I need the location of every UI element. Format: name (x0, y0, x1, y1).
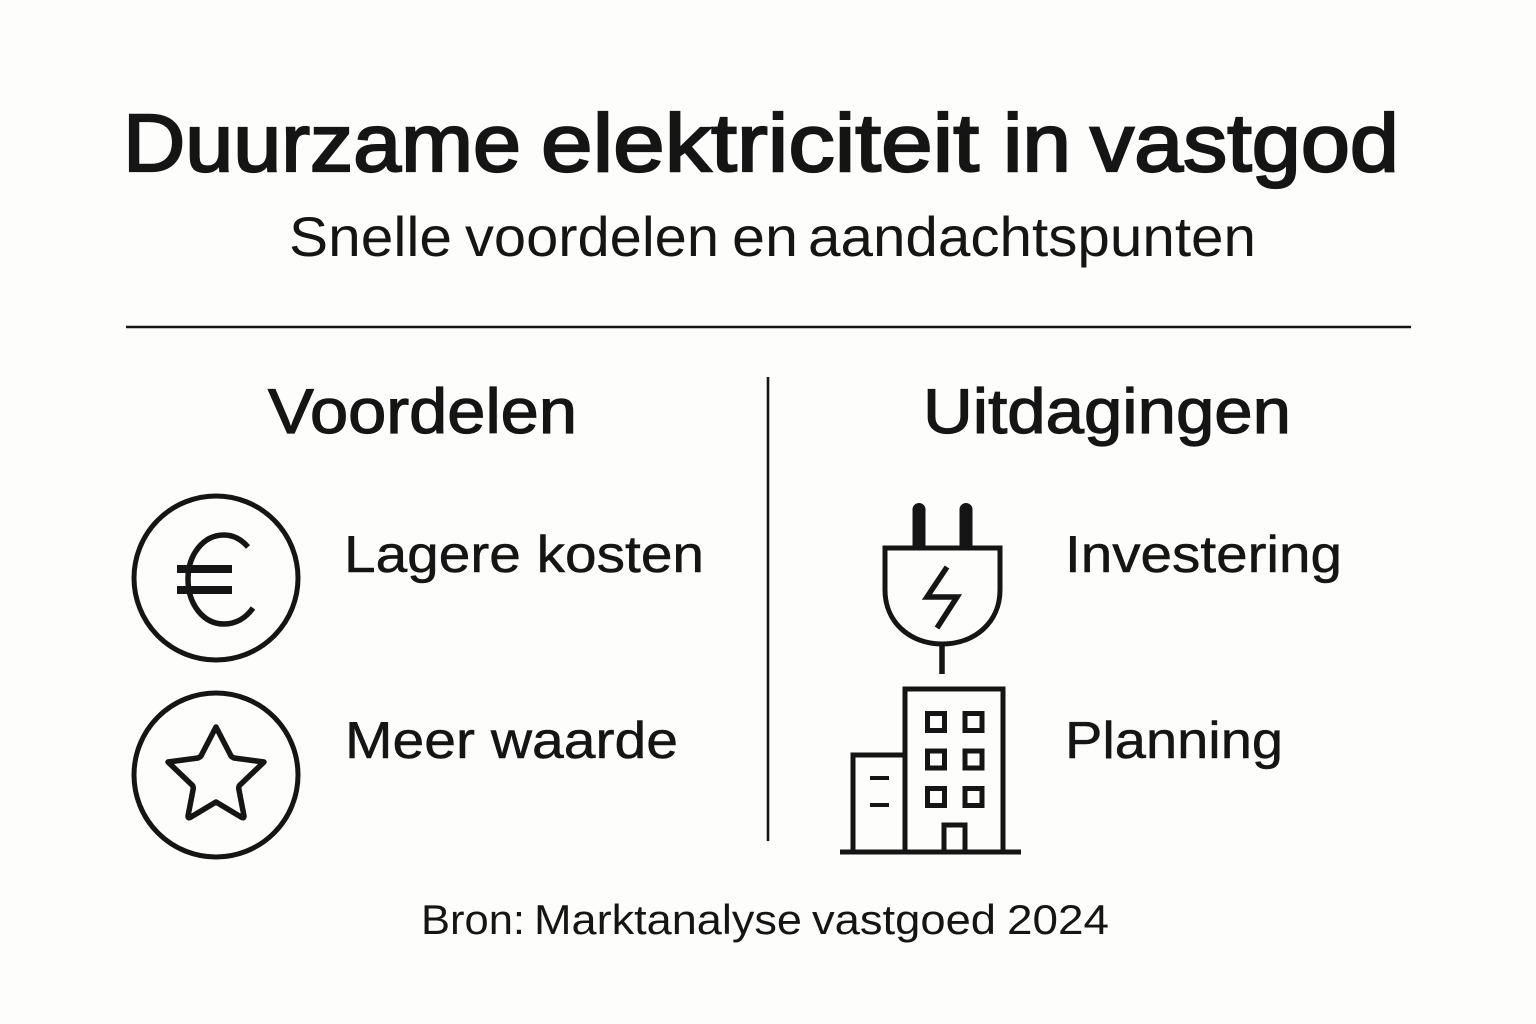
source: vastgoed (812, 896, 996, 943)
source: Marktanalyse (534, 896, 802, 943)
subtitle: aandachtspunten (808, 205, 1256, 268)
heading: voordelen: Voordelen (268, 377, 577, 447)
panel: uitdagingen (840, 377, 1342, 852)
subtitle: voordelen (465, 205, 719, 268)
title: elektriciteit (541, 98, 979, 189)
title: in (1003, 98, 1071, 189)
panel: voordelen (134, 377, 704, 857)
label: investering: Investering (1065, 526, 1342, 584)
icon: plug (885, 503, 1000, 674)
subtitle (289, 205, 1256, 268)
title: vastgod (1090, 98, 1399, 189)
label: meer waarde: Meer waarde (345, 712, 678, 770)
subtitle: en (732, 205, 798, 268)
title (123, 98, 1399, 189)
icon: euro coin (134, 496, 298, 660)
source: Bron: (421, 896, 525, 943)
heading: uitdagingen: Uitdagingen (923, 377, 1291, 447)
title: Duurzame (123, 98, 521, 189)
subtitle: Snelle (289, 205, 452, 268)
source (421, 896, 1109, 943)
icon: star coin (134, 693, 298, 857)
icon: buildings (840, 689, 1021, 852)
label: lagere kosten: Lagere kosten (344, 526, 704, 584)
label: planning: Planning (1065, 712, 1283, 770)
source: 2024 (1007, 896, 1109, 943)
